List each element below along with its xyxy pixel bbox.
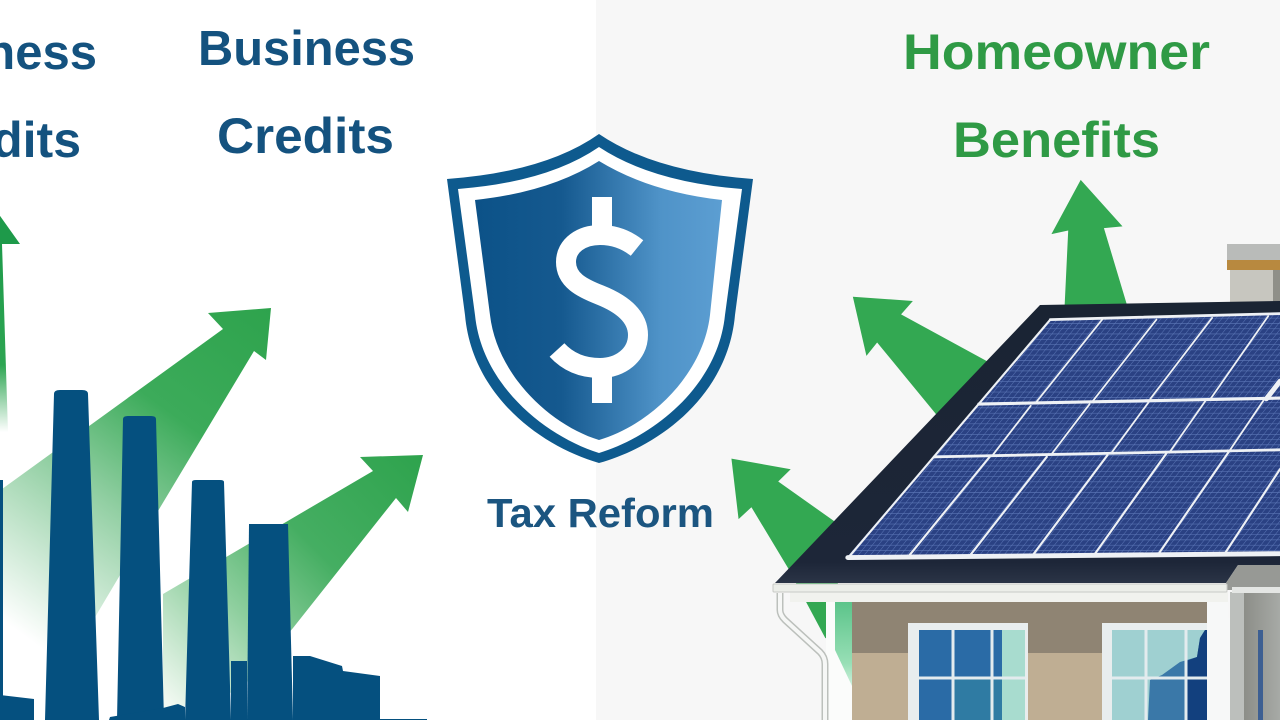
heading word: Business: Business bbox=[198, 22, 415, 76]
far-left cropped smokestack bbox=[0, 480, 3, 720]
chimney cap bbox=[1227, 244, 1280, 260]
smokestack 2 bbox=[117, 416, 164, 720]
smokestack 3 bbox=[185, 480, 231, 720]
porch gable bbox=[1226, 565, 1280, 590]
icon: factory smokestack silhouette bbox=[0, 390, 427, 720]
porch white column bbox=[1207, 600, 1233, 720]
heading word: Benefits: Benefits bbox=[953, 112, 1160, 168]
arrow: lower homeowner arrow bbox=[731, 459, 838, 638]
white corner trim bbox=[826, 602, 852, 720]
window lower glass tint bbox=[953, 678, 1002, 720]
window glass pale reflection bbox=[1002, 630, 1025, 720]
porch column shade bbox=[1230, 592, 1244, 720]
solar panel array bbox=[847, 314, 1280, 558]
icon: chimney bbox=[1227, 244, 1280, 306]
arrow: long rising arrow from factory bbox=[0, 308, 271, 710]
wall shadow band bbox=[852, 600, 1208, 653]
window dark pane bbox=[1186, 630, 1208, 720]
shield white ring bbox=[458, 147, 742, 453]
chimney tan band bbox=[1227, 260, 1280, 270]
porch gable trim bbox=[1232, 587, 1280, 593]
wall: house facade bbox=[852, 600, 1208, 720]
icon: dollar sign bbox=[557, 197, 638, 403]
arrow: upward homeowner arrow bbox=[1051, 180, 1127, 306]
arrow: partially cropped upward arrow at far left bbox=[0, 213, 20, 432]
far-left building block bbox=[0, 695, 34, 720]
icon: tax shield with dollar sign bbox=[447, 134, 753, 463]
window glass pale bbox=[1112, 630, 1208, 720]
arrows fanning out behind the house bbox=[731, 180, 1127, 638]
window: left bbox=[908, 623, 1028, 720]
chimney shaded side bbox=[1273, 270, 1280, 306]
roof gutter and soffit bbox=[773, 584, 1228, 602]
heading: Homeowner Benefits bbox=[903, 24, 1210, 168]
arrow: faded tail beside the house bbox=[835, 602, 852, 686]
factory base bbox=[109, 656, 427, 720]
shield outer border bbox=[447, 134, 753, 463]
soffit bbox=[790, 592, 1228, 602]
window: right bbox=[1102, 623, 1208, 720]
label: Tax Reform: Tax Reform bbox=[487, 490, 714, 536]
smokestack 1 bbox=[45, 390, 99, 720]
window muntins bbox=[919, 630, 1025, 720]
arrow: middle homeowner arrow bbox=[853, 297, 991, 416]
heading word: Credits: Credits bbox=[217, 108, 394, 164]
solar panel surface bbox=[847, 314, 1280, 557]
porch wall bbox=[1233, 592, 1280, 720]
background: right homeowner side bbox=[596, 0, 1280, 720]
window muntins bbox=[1112, 630, 1208, 720]
heading: Business Credits bbox=[198, 22, 415, 164]
gutter bbox=[773, 584, 1227, 592]
downspout bbox=[780, 593, 825, 720]
heading: cropped Business Credits (left copy) bbox=[0, 26, 97, 168]
porch: right side structure bbox=[1207, 565, 1280, 720]
porch blue post bbox=[1258, 630, 1263, 720]
shield blue face bbox=[475, 161, 722, 440]
window frame bbox=[908, 623, 1028, 720]
background: left business side bbox=[0, 0, 596, 720]
heading word: Homeowner: Homeowner bbox=[903, 24, 1210, 80]
window glass blue bbox=[919, 630, 1002, 720]
chimney body bbox=[1230, 270, 1273, 306]
wall lower stucco bbox=[852, 653, 1208, 720]
roof and solar panels bbox=[775, 301, 1280, 583]
roof: dark shingle roof bbox=[775, 301, 1280, 583]
corner trim and faded arrow tail bbox=[826, 602, 852, 720]
window tree reflection bbox=[1148, 630, 1208, 720]
smokestack 4 bbox=[247, 524, 293, 720]
solar panel frame and dividers bbox=[848, 314, 1280, 558]
window frame bbox=[1102, 623, 1208, 720]
arrow: lower rising arrow from factory bbox=[163, 455, 423, 712]
